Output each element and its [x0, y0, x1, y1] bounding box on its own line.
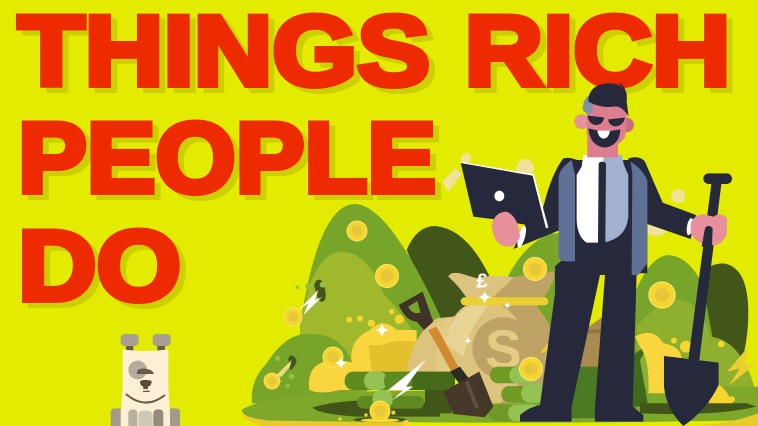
garden shovel: [399, 292, 493, 417]
title shadow: PEOPLE: [24, 107, 442, 218]
dog paws: [111, 408, 180, 426]
title text: [18, 0, 730, 321]
small gold dots: [338, 309, 409, 426]
title shadow: [24, 0, 736, 326]
neck and head: [574, 82, 634, 157]
money bag dollar badge: S: [485, 318, 522, 380]
gold pile: [309, 323, 417, 392]
title: [18, 0, 736, 326]
businessman: [461, 82, 732, 426]
dog ears: [121, 334, 171, 351]
title shadow: THINGS: [24, 0, 436, 111]
shirt: [577, 155, 628, 243]
money bag dollar badge: [472, 317, 534, 380]
title shadow: RICH: [470, 0, 736, 111]
right hand: [686, 214, 727, 247]
tablet: [461, 162, 548, 228]
cash stacks: [345, 372, 455, 413]
title shadow: DO: [24, 215, 187, 326]
sunglasses: [588, 116, 625, 126]
yellow lightning: [727, 347, 757, 385]
ground highlight: [693, 413, 758, 426]
large shovel: [664, 173, 732, 426]
dog mascot: [111, 334, 180, 426]
tie: [598, 162, 606, 244]
money bag left lobe: [407, 317, 453, 377]
floating coins behind man: [442, 153, 685, 236]
left mound: [252, 334, 373, 403]
left hills: [242, 204, 758, 426]
pound sign: £: [476, 269, 488, 292]
ground: [242, 390, 407, 426]
beard and smile: [588, 128, 620, 148]
legs: [520, 160, 643, 422]
dark ground pits: [313, 400, 440, 417]
title text: PEOPLE: [18, 102, 436, 213]
hair: [588, 82, 629, 117]
jacket and arms: [513, 157, 696, 273]
money bag: [437, 269, 603, 403]
title text: DO: [18, 210, 181, 321]
left hand: [492, 212, 528, 248]
vest: [559, 160, 647, 275]
right hills: [503, 233, 755, 410]
treasure scene: [242, 82, 758, 426]
cash stacks right of bag: [488, 333, 758, 426]
holes and flying coin bolts: [275, 280, 426, 401]
dog body: [120, 349, 171, 426]
coins: [264, 221, 675, 421]
dog face: [126, 361, 165, 403]
money bag tie: [461, 297, 548, 305]
